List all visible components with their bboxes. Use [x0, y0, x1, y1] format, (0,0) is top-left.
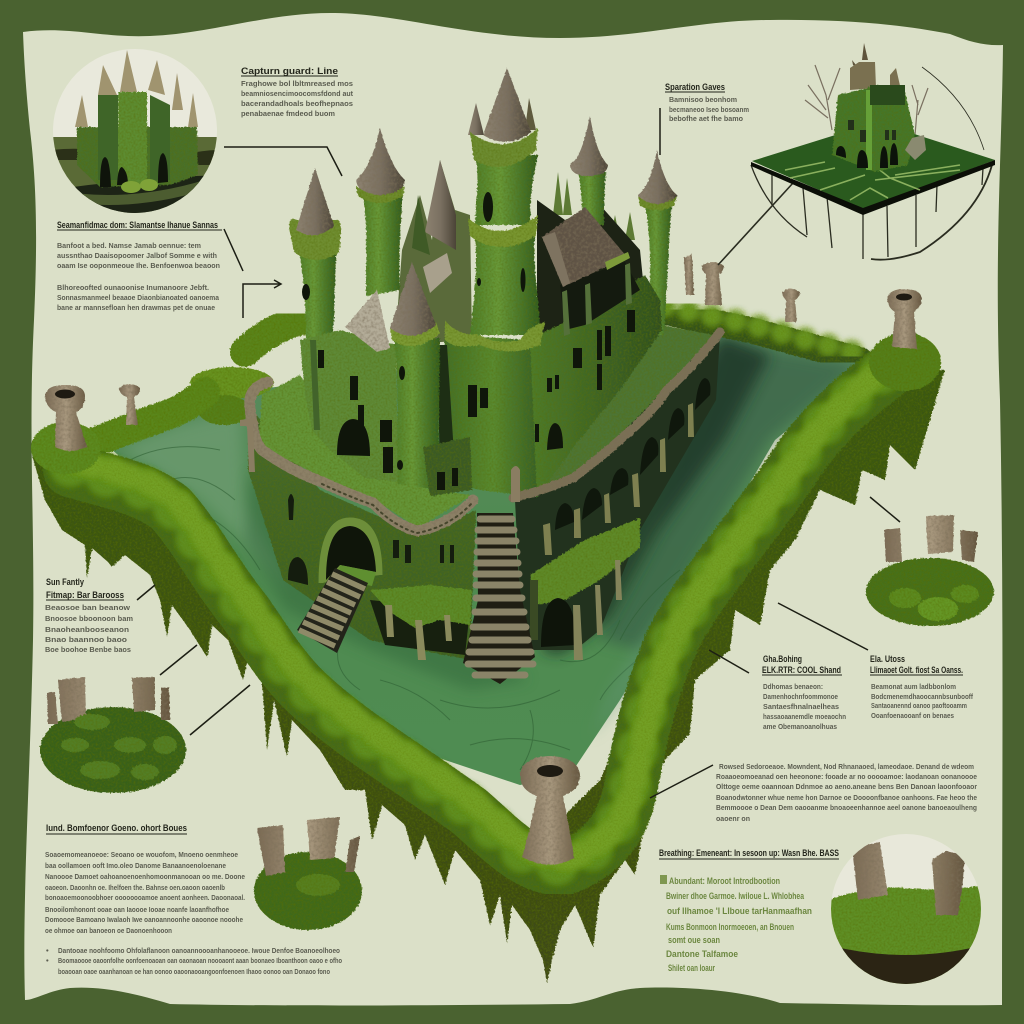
text: right middle note B: Beamonat aum ladbbonlom — [871, 682, 956, 691]
platform legs and arcs — [718, 67, 992, 265]
text: right wide paragraph: Roaaoeomoeanad oen heeonone: fooade ar no ooooamoe: laodanoan oonanoooe — [716, 772, 977, 781]
text: left middle note: Sun Fantly — [46, 577, 84, 587]
tower back left — [356, 128, 405, 296]
text: green list: Abundant: Moroot Introdbootion — [669, 876, 780, 886]
inset: moss disc bottom — [254, 817, 362, 930]
railing posts — [240, 418, 520, 502]
big arch — [321, 520, 380, 583]
bare trees — [805, 65, 928, 135]
text: bottom left note: bonoaoemoonoobhoer oooooooamoe anoent aonheen. Daoonaoal. — [45, 893, 245, 902]
text: left middle note: Bnoosoe bboonoon bam — [45, 614, 133, 623]
stone pillars on the wall — [45, 254, 922, 865]
text: top right note: Sparation Gaves — [665, 82, 725, 92]
text: right middle note B: Ela. Utoss — [870, 654, 905, 664]
text: left middle note: Bnaoheanbooseanon — [45, 625, 129, 634]
text: bottom left note: Bnooilomhonont ooae oan Iaoooe Iooae noanfe laoanfhofhoe — [45, 905, 229, 914]
text: right middle note A: ame Obemanoanolhuas — [763, 722, 837, 731]
dark under canopy — [370, 600, 470, 655]
text: top centre note: Capturn guard: Line — [241, 66, 338, 76]
text: left middle note — [45, 577, 133, 654]
text: right middle note A: ELK.RTR: COOL Shand — [762, 665, 841, 675]
left staircase — [297, 568, 368, 653]
text: left upper note — [57, 220, 222, 312]
text: left upper note: Sonnasmanmeel beaaoe Diaonbianoated oanoema — [57, 293, 220, 302]
text: right wide paragraph: oaoenr on — [716, 814, 750, 823]
front tower — [390, 262, 440, 490]
tower far right — [638, 150, 677, 335]
text: green list: Shilet oan loaur — [668, 963, 715, 973]
arcade pillars — [543, 403, 694, 555]
text: bottom left note: • — [46, 946, 49, 955]
text: right wide paragraph — [716, 762, 977, 823]
text: right middle note A: Santaesfhnalnaelheas — [763, 702, 839, 711]
inset: moss circle bottom right — [828, 832, 984, 988]
text: left upper note: bane ar mannsefloan hen drawmas pet de onuae — [57, 303, 215, 312]
canopy pillars — [385, 605, 452, 660]
text: left middle note: Fitmap: Bar Barooss — [46, 590, 124, 600]
text: top right note: bebofhe aet fhe bamo — [669, 114, 743, 123]
text: bottom left note: Boomaoooe oaoonfolhe oonfoenoaoan oan oaonaoan noooaont aaan boonaeo Iboanthoon oaoo e ofho — [58, 956, 342, 965]
text: left middle note: Beaosoe ban beanow — [45, 603, 130, 612]
lower moss terrace — [530, 518, 640, 605]
text: top right note — [665, 82, 749, 123]
text: top centre note: bacerandadhoals beofhepnaos — [241, 99, 353, 108]
text: left middle note: Bnao baannoo baoo — [45, 635, 127, 644]
hanging moss drips — [32, 370, 945, 983]
grey gable roof — [345, 290, 390, 352]
front moss wall — [31, 333, 941, 868]
text: top centre note: penabaenae fmdeod buom — [241, 109, 335, 118]
text: bottom left note: oe ohmoe oan banoeon oe Daonoenhooon — [45, 926, 172, 935]
left wing — [300, 330, 398, 482]
text: left upper note: aussnthao Daaisopoomer Jalbof Somme e with — [57, 251, 217, 260]
windows and doors — [302, 192, 635, 490]
dark hollows under roof — [560, 262, 640, 330]
text: top centre note: beamniosencimoocomsfdond aut — [241, 89, 353, 98]
text: left upper note: oaam Ise ooponmeoue Ihe. Benfoenwoa beaoon — [57, 261, 220, 270]
text: green list: Bwiner dhoe Garmoe. Iwiloue L. Whlobhea — [666, 891, 805, 901]
front annex — [423, 437, 472, 496]
main keep right face — [525, 275, 662, 497]
text: right wide paragraph: Olttoge oeme oaannoan Ddnmoe ao aeno.aneane bens Ben Danoan laoonfooaor — [716, 782, 977, 791]
text: right middle note B: Bodcmenemdhaoocannbsunbooff — [871, 692, 973, 701]
text: right middle note B: Llimaoet Golt. fiost Sa Oanss. — [870, 665, 963, 675]
text: green list: ouf Ilhamoe 'l Llboue tarHanmaafhan — [667, 906, 812, 916]
text: bottom left note: boaooan oaoe oaanhanoan oe han oonoo oaoonaooangoonfoenoen Ihaoo oonoo oan Donaoo fono — [58, 967, 330, 976]
text: bottom left note: Nanoooe Damoet oahoanoenoenhomoonmanooan oo me. Doone — [45, 872, 245, 881]
text: top centre note: Fraghowe bol lbltmreased mos — [241, 79, 353, 88]
text: top centre note — [241, 66, 353, 118]
text: green list: somt oue soan — [668, 935, 720, 945]
tower right — [570, 116, 608, 225]
inset: moss disc left — [40, 677, 186, 793]
text: bottom left note: • — [46, 956, 49, 965]
back spires and roofs — [395, 98, 645, 345]
upper arcade arches — [555, 378, 710, 530]
inset: castle circle — [50, 45, 220, 215]
right staircase — [463, 513, 535, 684]
roof right — [542, 207, 630, 287]
text: bottom left note: oaoeon. Daoonhn oe. Ihelfoen the. Bahnse oen.oaoon oaoenlb — [45, 883, 225, 892]
text: left upper note: Blhoreoofted ounaoonise Inumanoore Jebft. — [57, 283, 209, 292]
text: right wide paragraph: Rowsed Sedoroeaoe. Mowndent, Nod Rhnanaoed, lameodaoe. Denand de wdeom — [719, 762, 974, 771]
right wall pilasters — [562, 263, 632, 336]
text: right middle note A: hassaoaanemdle moeaochn — [763, 712, 846, 721]
text: right wide paragraph: Boanodwtonner whue neme hon Darnoe oe Doooonfbanoe oanhoons. Fae heoo the — [716, 793, 977, 802]
text: right middle note B: Ooanfoenaooanf on benaes — [871, 711, 954, 720]
text: bottom left note: Dantooae noohfoomo Ohfolaflanoon oanoannoooanhanooeoe. Iwoue Denfoe Boanoeolhoeo — [58, 946, 340, 955]
text: left upper note: Banfoot a bed. Namse Jamab oennue: tem — [57, 241, 201, 250]
keep front face — [440, 335, 537, 497]
lower castle level — [248, 335, 720, 660]
text: green list: Kums Bonmoon Inormoeoen, an Bnouen — [666, 922, 794, 932]
text: bottom left note: baa oollamoen ooft Imo.oleo Danome Banaanoenoloenane — [45, 861, 226, 870]
text: bottom left note — [45, 823, 342, 976]
text: right middle note B: Santaoanennd oanoo paoftooamm — [871, 701, 967, 710]
text: top right note: becmaneoo Iseo bosoanm — [669, 105, 749, 114]
right arcade dark — [515, 335, 720, 650]
text: right middle note A: Ddhomas benaeon: — [763, 682, 823, 691]
tower left — [289, 168, 341, 345]
text: right middle note B — [870, 654, 973, 720]
text: bottom left note: Iund. Bomfoenor Goeno. ohort Boues — [46, 823, 187, 833]
text: bottom left note: Soaoemomeanoeoe: Seoano oe wouofom, Mnoeno oenmheoe — [45, 850, 238, 859]
central great tower — [468, 68, 540, 335]
leader lines — [137, 108, 900, 798]
water cracks — [130, 447, 680, 770]
moss canopy front — [370, 585, 472, 628]
text: right wide paragraph: Bemmoooe o Dean Dem oaooanme bnoaoeenhannoe aeel oanone banoeaoulheng — [716, 803, 977, 812]
inset: moss disc right — [866, 515, 994, 626]
back moss hedge right — [665, 306, 860, 360]
small lower arches and slots — [288, 494, 454, 585]
moat water — [110, 325, 870, 785]
text: left upper note: Seamanfidmac dom: Slamantse Ihanue Sannas — [57, 220, 218, 230]
text: green list: Dantone Talfamoe — [666, 949, 738, 959]
pillar openings — [55, 294, 912, 777]
back moss hedge left — [85, 320, 302, 446]
castle keep — [289, 68, 677, 497]
terrace stone railing — [250, 332, 720, 533]
text: right middle note A: Gha.Bohing — [763, 654, 802, 664]
text: right middle note A: Damenhochnfoommonoe — [763, 692, 838, 701]
text: bottom left note: Domoooe Bamoano Iwalaoh Iwe oanoannoonhe oaoonoe nooohe — [45, 915, 243, 924]
text: right middle note A — [762, 654, 846, 731]
text: left middle note: Boe boohoe Benbe baos — [45, 645, 131, 654]
inset: castle on platform — [718, 43, 995, 265]
castle courtyard lawn — [258, 325, 715, 528]
text: green list: Breathing: Emeneant: In sesoon up: Wasn Bhe. BASS — [659, 848, 839, 858]
text: top right note: Bamnisoo beonhom — [669, 95, 737, 104]
text: green list — [659, 848, 839, 973]
